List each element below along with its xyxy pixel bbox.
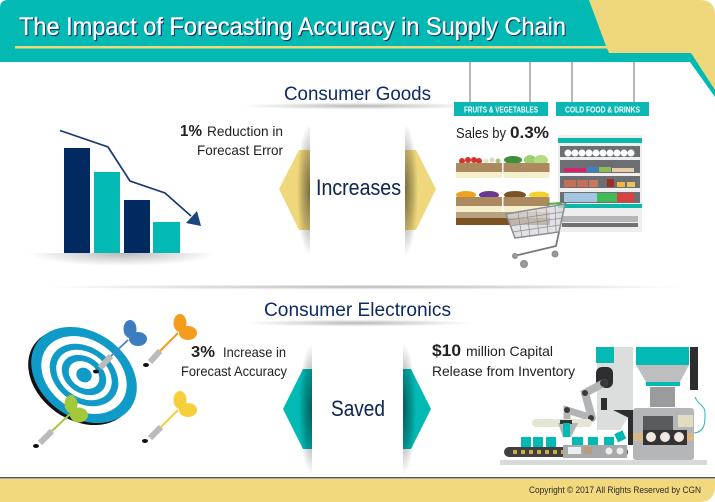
illustration: fruit and vegetable stand <box>456 155 550 225</box>
text: 1% reduction in forecast error: 1% <box>180 123 202 140</box>
bar chart with falling trend arrow <box>38 130 206 264</box>
icon: green dart <box>33 395 88 448</box>
illustration: dartboard <box>10 307 155 445</box>
text: $10 million capital release <box>432 341 575 379</box>
text: $10 million capital release: million Capital <box>466 343 553 359</box>
text: sales by 0.3%: Sales by <box>456 126 507 142</box>
text: sales by 0.3%: 0.3% <box>510 123 549 142</box>
footer bar <box>0 477 715 502</box>
icon: orange dart <box>143 314 197 367</box>
text: 1% reduction in forecast error: Forecast Error <box>197 142 283 158</box>
text: 3% increase in forecast accuracy: Increase in <box>223 344 286 360</box>
text: 3% increase in forecast accuracy: 3% <box>191 344 215 361</box>
callout: Increases <box>279 118 436 258</box>
illustration: refrigerated display case <box>558 135 642 232</box>
callout: Saved: Saved <box>331 396 385 421</box>
heading: Consumer Goods: Consumer Goods <box>284 84 431 105</box>
text: 1% reduction in forecast error <box>180 123 283 158</box>
heading: Consumer Electronics: Consumer Electronics <box>264 300 451 321</box>
title: The Impact of Forecasting Accuracy in Supply Chain <box>19 13 566 41</box>
text: $10 million capital release: $10 <box>432 341 461 360</box>
callout: Increases: Increases <box>316 175 401 200</box>
callout: Saved <box>283 335 431 477</box>
text: 3% increase in forecast accuracy: Forecast Accuracy <box>181 363 287 379</box>
store labels with hanging poles <box>454 62 649 116</box>
illustration: shopping cart <box>506 203 566 268</box>
trend arrow <box>60 130 201 226</box>
text: sales by 0.3% <box>456 123 549 142</box>
icon: yellow dart <box>142 391 197 443</box>
store labels with hanging poles: COLD FOOD & DRINKS <box>565 104 640 114</box>
icon: blue dart <box>93 320 147 374</box>
header banner <box>0 0 715 97</box>
text: 1% reduction in forecast error: Reduction in <box>207 123 283 139</box>
text: 3% increase in forecast accuracy <box>181 344 287 379</box>
section divider shadows <box>35 102 695 326</box>
copyright: Copyright © 2017 All Rights Reserved by CGN <box>529 485 701 495</box>
text: $10 million capital release: Release from Inventory <box>432 363 575 379</box>
store labels with hanging poles: FRUITS & VEGETABLES <box>464 104 538 114</box>
illustration: factory robot and conveyor <box>500 347 707 465</box>
